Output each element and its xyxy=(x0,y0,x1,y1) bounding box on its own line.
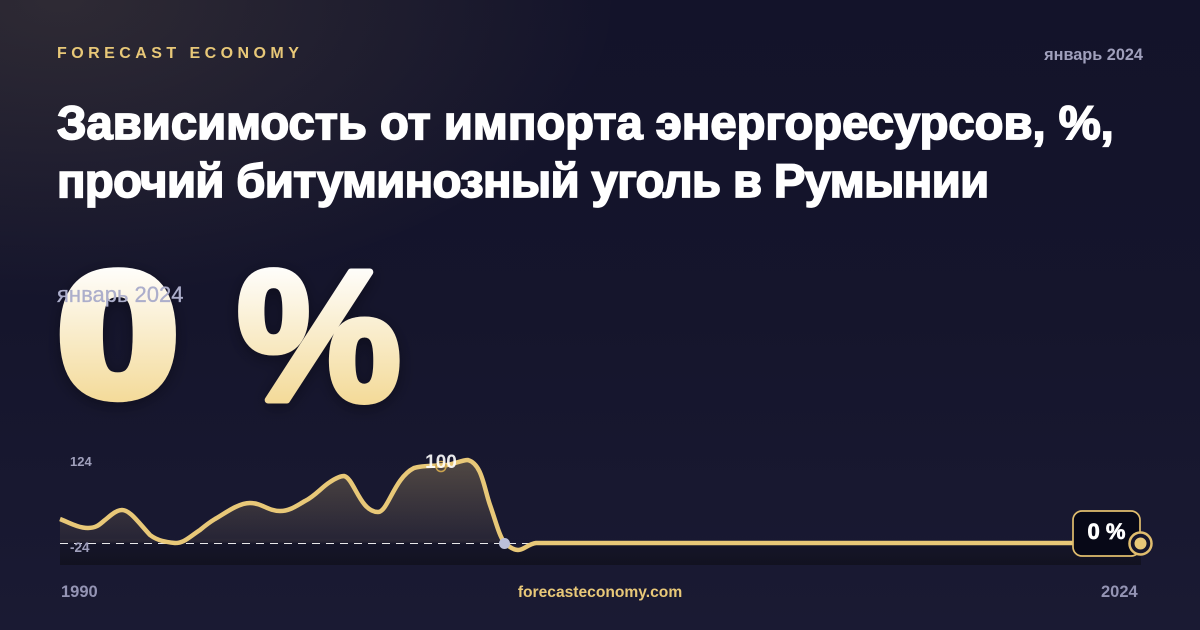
brand label: FORECAST ECONOMY xyxy=(57,45,303,62)
data line xyxy=(60,460,1141,550)
website: forecasteconomy.com xyxy=(518,584,682,601)
max label: 100 xyxy=(425,452,457,473)
end point marker xyxy=(1130,532,1152,554)
max marker xyxy=(436,462,446,472)
title xyxy=(57,97,1114,208)
line chart xyxy=(59,452,1153,601)
title: Зависимость от импорта энергоресурсов, %, xyxy=(57,97,1114,150)
baseline dashed xyxy=(60,542,1141,544)
big value: 0 xyxy=(58,240,178,433)
date top right: январь 2024 xyxy=(1044,46,1143,64)
start year: 1990 xyxy=(61,583,98,601)
current value callout: 0 % xyxy=(1088,519,1125,544)
axis min label: -24 xyxy=(70,540,90,555)
title: прочий битуминозный уголь в Румынии xyxy=(57,155,989,208)
area fill xyxy=(60,460,1141,565)
axis max label: 124 xyxy=(70,454,92,469)
end year: 2024 xyxy=(1101,583,1139,601)
current value callout xyxy=(1073,511,1140,556)
overlapping date label: январь 2024 xyxy=(57,282,184,307)
big value xyxy=(58,240,401,440)
min marker xyxy=(499,538,510,549)
